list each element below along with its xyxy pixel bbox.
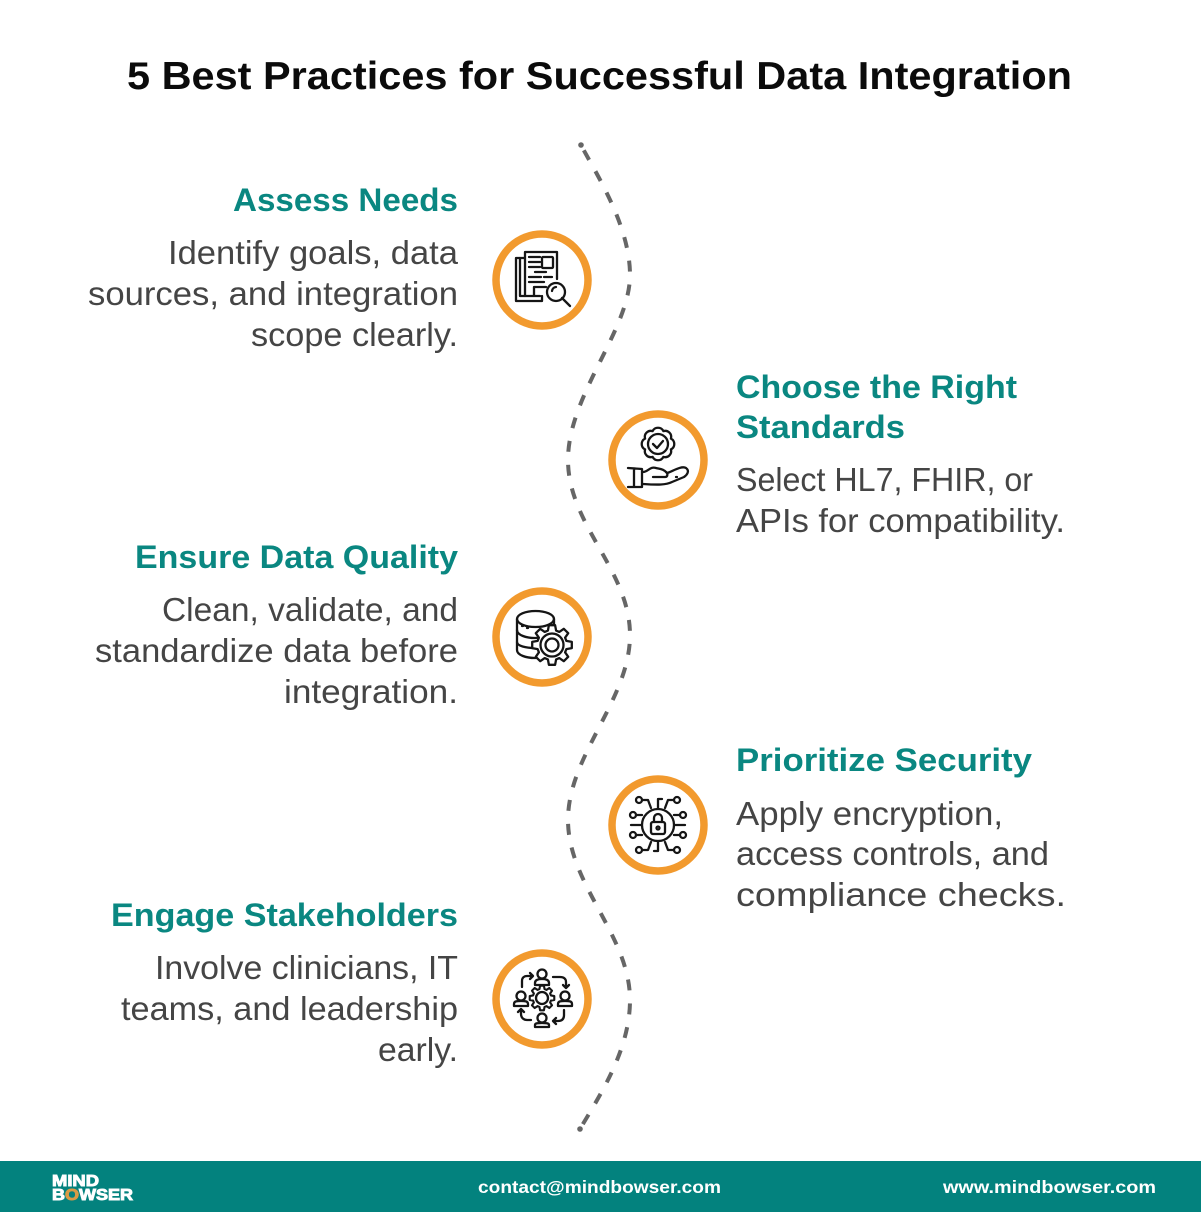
panel: choose the right standards: [736, 369, 1065, 539]
text: prioritize security description: [736, 795, 1066, 913]
heading: assess needs: Assess Needs: [233, 182, 458, 218]
heading: choose the right standards: [736, 369, 1017, 445]
logo: Mindbowser: [52, 1173, 133, 1204]
logo: Mindbowser: BOWSER: [52, 1187, 133, 1204]
heading: choose the right standards: Choose the Right: [736, 369, 1017, 405]
icon: circuit lock: [612, 779, 704, 871]
panel: engage stakeholders: [111, 897, 458, 1068]
text: assess needs description: sources, and integration: [88, 275, 458, 312]
panel: assess needs: [88, 182, 459, 353]
text: ensure data quality description: [95, 591, 458, 710]
icon: database with gear: [496, 591, 588, 683]
text: engage stakeholders description: teams, and leadership: [121, 990, 458, 1027]
heading: choose the right standards: Standards: [736, 409, 905, 445]
text: engage stakeholders description: [121, 949, 458, 1068]
text: assess needs description: scope clearly.: [251, 316, 458, 353]
contact email: contact@mindbowser.com: [478, 1177, 721, 1197]
text: choose the right standards description: APIs for compatibility.: [736, 502, 1065, 539]
logo: Mindbowser: MIND: [52, 1173, 99, 1190]
title: 5 Best Practices for Successful Data Integration: [127, 55, 1072, 98]
text: assess needs description: [88, 234, 459, 353]
website: www.mindbowser.com: [942, 1177, 1156, 1197]
panel: ensure data quality: [95, 539, 458, 710]
text: prioritize security description: access controls, and: [736, 835, 1049, 872]
heading: ensure data quality: Ensure Data Quality: [135, 539, 458, 575]
text: ensure data quality description: integration.: [284, 673, 458, 710]
text: engage stakeholders description: Involve clinicians, IT: [155, 949, 458, 986]
text: ensure data quality description: standardize data before: [95, 632, 458, 669]
footer band: [0, 1161, 1201, 1212]
icon: people around gear: [496, 953, 588, 1045]
heading: prioritize security: Prioritize Security: [736, 742, 1032, 778]
text: assess needs description: Identify goals, data: [168, 234, 459, 271]
heading: engage stakeholders: Engage Stakeholders: [111, 897, 458, 933]
text: choose the right standards description: Select HL7, FHIR, or: [736, 461, 1033, 498]
icon: document with magnifier: [496, 234, 588, 326]
dashed winding path: [568, 142, 630, 1132]
text: ensure data quality description: Clean, validate, and: [162, 591, 458, 628]
text: choose the right standards description: [736, 461, 1065, 539]
text: prioritize security description: Apply encryption,: [736, 795, 1003, 832]
panel: prioritize security: [736, 742, 1066, 913]
text: engage stakeholders description: early.: [378, 1031, 458, 1068]
icon: hand holding badge: [612, 414, 704, 506]
text: prioritize security description: compliance checks.: [736, 876, 1066, 913]
